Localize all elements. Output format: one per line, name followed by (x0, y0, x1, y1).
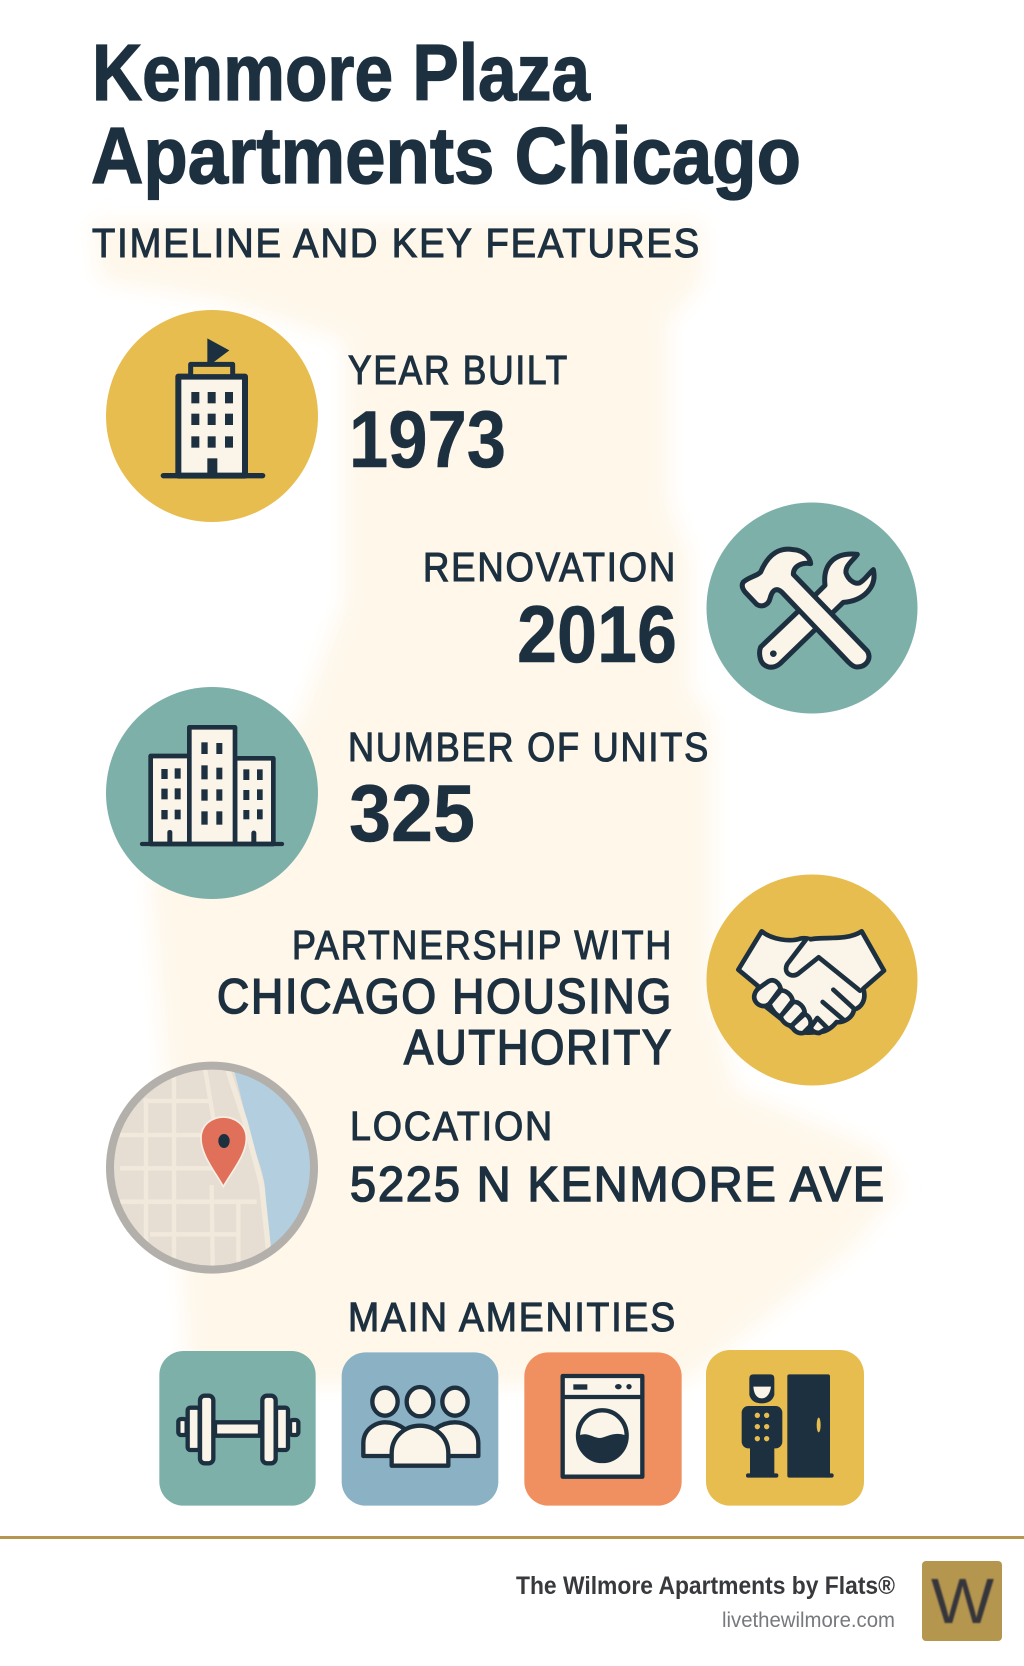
icon: concierge and door (706, 1350, 864, 1506)
label: number of units: NUMBER OF UNITS (348, 724, 710, 770)
panel: location (110, 1066, 886, 1270)
value: 2016: 2016 (517, 590, 677, 680)
heading: main amenities: MAIN AMENITIES (348, 1294, 677, 1340)
footer: brand text (516, 1572, 896, 1632)
icon: handshake (706, 874, 918, 1086)
value: chicago housing authority: AUTHORITY (404, 1021, 673, 1075)
value: chicago housing authority: CHICAGO HOUSING (217, 970, 673, 1024)
value: address: 5225 N KENMORE AVE (350, 1158, 886, 1212)
value: 325: 325 (349, 769, 475, 859)
panel: renovation (423, 502, 918, 714)
icon: apartment towers (106, 687, 318, 899)
subtitle: TIMELINE AND KEY FEATURES (92, 220, 701, 266)
footer: brand text: The Wilmore Apartments by Flats® (516, 1572, 896, 1600)
title: Kenmore Plaza (92, 28, 590, 117)
panel: number of units (106, 687, 710, 899)
icon: residents group (342, 1352, 498, 1506)
panel: partnership (217, 874, 918, 1086)
label: partnership with: PARTNERSHIP WITH (292, 922, 673, 968)
value: chicago housing authority (217, 970, 673, 1075)
footer: logo: W (931, 1565, 995, 1637)
icon: washing machine (524, 1352, 682, 1506)
icon: dumbbell (159, 1351, 316, 1506)
footer: logo (922, 1561, 1002, 1641)
title (91, 28, 801, 200)
label: location: LOCATION (350, 1103, 554, 1149)
footer rule (0, 1536, 1024, 1539)
title: Apartments Chicago (91, 111, 801, 200)
icon: building with flag (106, 310, 318, 522)
label: renovation: RENOVATION (423, 544, 677, 590)
cream background band (92, 222, 900, 1385)
panel: year built (106, 310, 569, 522)
label: year built: YEAR BUILT (348, 347, 569, 393)
icon: hammer and wrench (706, 502, 918, 714)
icon: map with pin (110, 1066, 320, 1270)
panel: main amenities (159, 1294, 864, 1506)
footer: brand text: livethewilmore.com (722, 1609, 895, 1632)
value: 1973: 1973 (349, 395, 506, 485)
